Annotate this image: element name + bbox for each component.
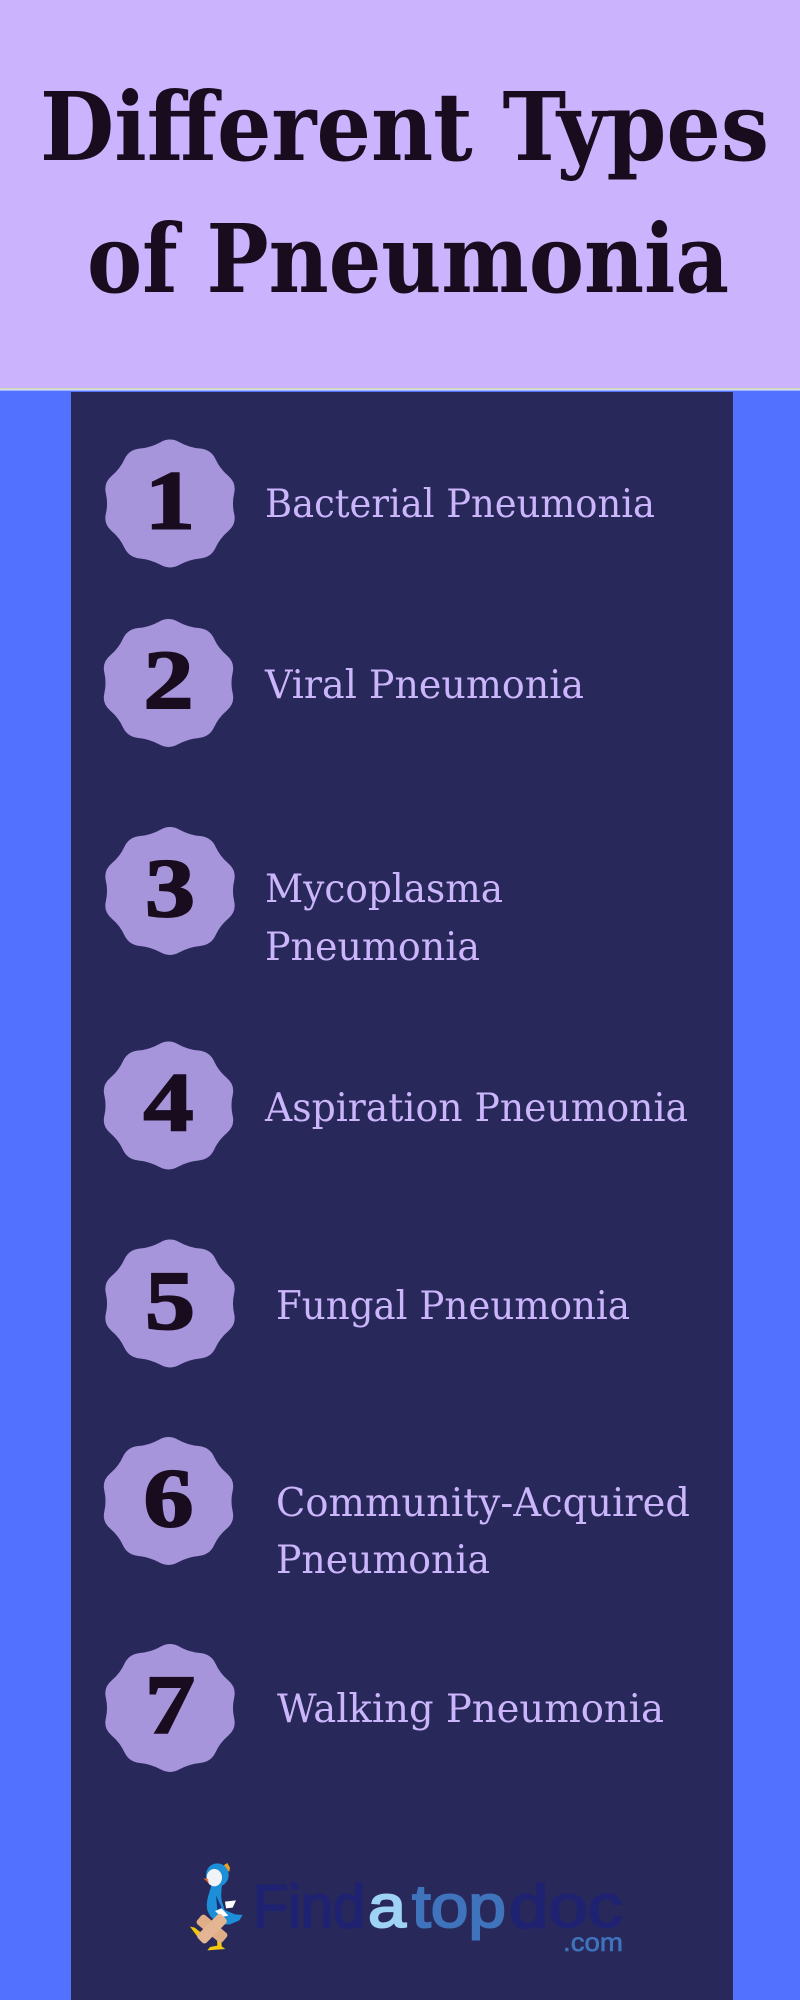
badge 5 <box>105 1240 235 1367</box>
wordmark: doc <box>509 1873 623 1940</box>
label 1: Bacterial Pneumonia <box>265 482 655 527</box>
item 7 <box>105 1644 664 1772</box>
item 4 <box>104 1042 688 1169</box>
label 6 <box>276 1481 690 1583</box>
item 2 <box>104 619 584 747</box>
title <box>40 72 769 315</box>
wordmark: .com <box>563 1927 623 1957</box>
badge 2 <box>104 619 233 747</box>
item 5 <box>105 1240 630 1367</box>
badge 2: 2 <box>144 634 194 727</box>
badge 4 <box>104 1042 233 1169</box>
label 3 <box>265 867 503 970</box>
header bottom edge <box>0 388 800 390</box>
label 3: Pneumonia <box>265 925 480 970</box>
wordmark: top <box>412 1873 506 1940</box>
dark central panel <box>71 392 733 2000</box>
badge 4: 4 <box>144 1056 194 1150</box>
label 6: Community-Acquired <box>276 1481 690 1526</box>
badge 6: 6 <box>144 1452 194 1545</box>
badge 3 <box>105 827 235 955</box>
wordmark: a <box>368 1873 407 1940</box>
badge 7 <box>105 1644 235 1772</box>
badge 1 <box>105 440 235 567</box>
badge 1: 1 <box>145 454 195 548</box>
item 1 <box>105 440 655 567</box>
badge 7: 7 <box>145 1659 195 1752</box>
label 7: Walking Pneumonia <box>277 1687 664 1732</box>
label 3: Mycoplasma <box>265 867 503 912</box>
label 6: Pneumonia <box>276 1538 490 1583</box>
item 6 <box>104 1437 690 1583</box>
logo <box>190 1863 623 1957</box>
badge 6 <box>104 1437 233 1565</box>
badge 3: 3 <box>145 842 195 935</box>
label 4: Aspiration Pneumonia <box>264 1086 688 1131</box>
header panel <box>0 0 800 388</box>
wordmark <box>253 1873 623 1957</box>
wordmark: Find <box>253 1873 365 1940</box>
icon: bird mascot with bandage <box>190 1863 243 1950</box>
label 2: Viral Pneumonia <box>264 663 584 708</box>
label 5: Fungal Pneumonia <box>276 1284 630 1329</box>
item 3 <box>105 827 503 970</box>
badge 5: 5 <box>145 1254 195 1348</box>
